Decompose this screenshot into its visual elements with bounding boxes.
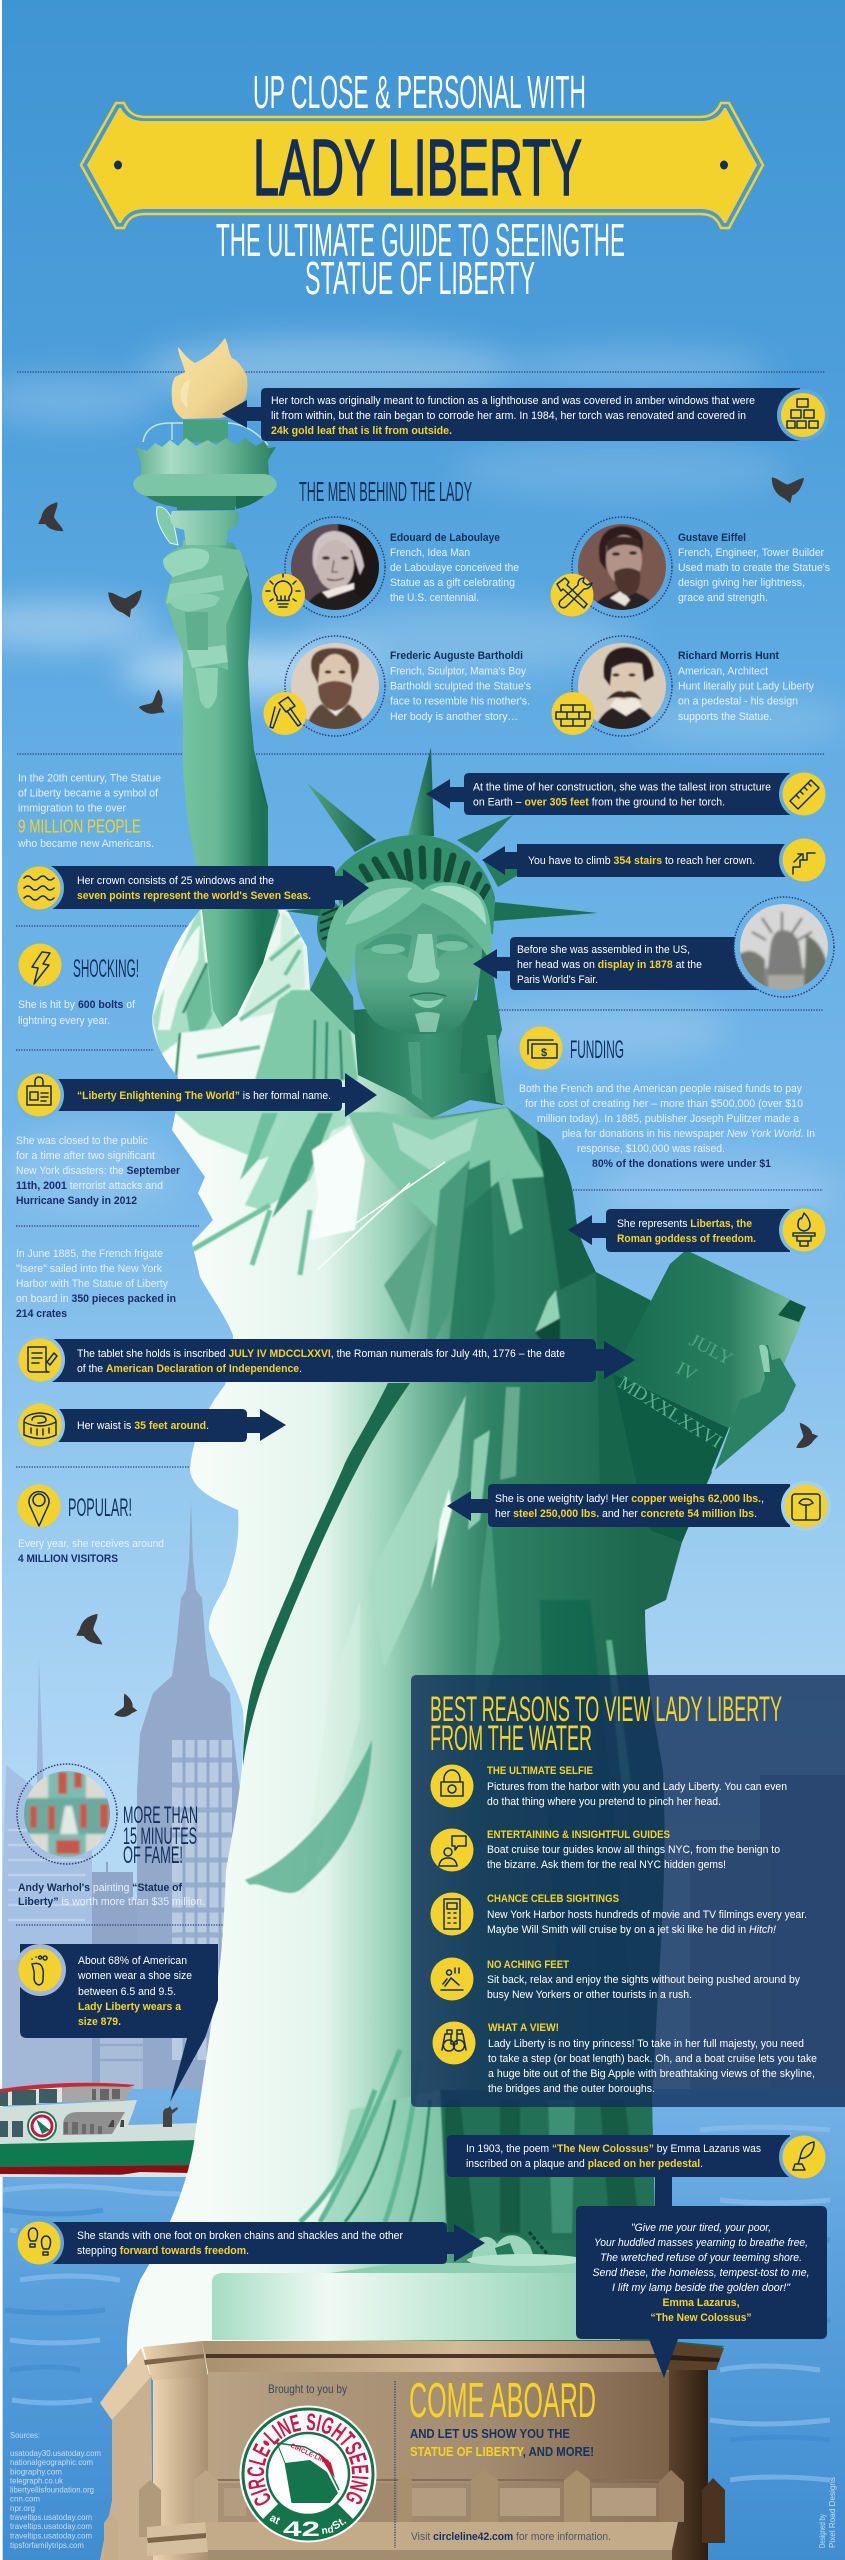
foot and chains bbox=[330, 2232, 600, 2273]
text: immigration: In the 20th century, The Statue bbox=[18, 772, 161, 784]
callout: shoe size: Lady Liberty wears a bbox=[78, 2001, 182, 2013]
reason: no aching feet: busy New Yorkers or other tourists in a rush. bbox=[487, 1989, 692, 2001]
reason: entertaining guides: ENTERTAINING & INSIGHTFUL GUIDES bbox=[487, 1829, 670, 1841]
reason: entertaining guides: Boat cruise tour guides know all things NYC, from the benign to bbox=[487, 1844, 780, 1856]
callout: poem quote: The wretched refuse of your teeming shore. bbox=[600, 2252, 802, 2264]
Bartholdi text: French, Sculptor, Mama's Boy bbox=[390, 666, 526, 678]
shocking text bbox=[18, 999, 136, 1027]
text: shipped in crates: on board in 350 pieces packed in bbox=[16, 1293, 176, 1305]
icon: bricks bbox=[552, 692, 594, 735]
sources: tipsforfamilytrips.com bbox=[10, 2541, 84, 2550]
sources: nationalgeographic.com bbox=[10, 2458, 93, 2467]
heading: more than 15 minutes of fame: OF FAME! bbox=[123, 1842, 183, 1869]
clouds bbox=[0, 336, 845, 1226]
pedestal lower panels bbox=[104, 2470, 725, 2560]
text: shipped in crates: "Isere" sailed into the New York bbox=[16, 1263, 162, 1275]
reason: no aching feet bbox=[430, 1958, 800, 2001]
callout: 354 stairs bbox=[482, 835, 829, 885]
text: closed to the public bbox=[16, 1135, 181, 1207]
subtitle bbox=[216, 214, 625, 304]
long dark fold bbox=[243, 1383, 410, 1766]
torch text: 24k gold leaf that is lit from outside. bbox=[271, 425, 452, 437]
pedestal bbox=[100, 2340, 725, 2560]
Eiffel text: French, Engineer, Tower Builder bbox=[678, 547, 824, 559]
sponsor tagline bbox=[410, 2426, 594, 2459]
callout: the new colossus bbox=[447, 2132, 829, 2182]
panel: best reasons to view from the water bbox=[411, 1675, 845, 2107]
reason: what a view: a huge bite out of the Big Apple with breathtaking views of the skyline, bbox=[488, 2068, 815, 2080]
heading: more than 15 minutes of fame: MORE THAN bbox=[123, 1802, 198, 1829]
reason: the ultimate selfie: THE ULTIMATE SELFIE bbox=[487, 1765, 593, 1777]
reason: the ultimate selfie: do that thing where you pretend to pinch her head. bbox=[487, 1796, 721, 1808]
robe folds bbox=[152, 905, 660, 2240]
text: SHOCKING! bbox=[73, 955, 139, 983]
sponsor tagline: AND LET US SHOW YOU THE bbox=[410, 2426, 570, 2441]
panel: Gustave Eiffel bbox=[550, 517, 830, 617]
Hunt text: Richard Morris Hunt bbox=[678, 650, 779, 662]
designer credit: Pixel Road Designs bbox=[828, 2477, 837, 2548]
harbor water bbox=[3, 2089, 845, 2560]
callout: weight bbox=[447, 1481, 831, 1531]
text: closed to the public: for a time after two significant bbox=[16, 1150, 155, 1162]
ship: CIRCLE·LINE bbox=[289, 2442, 330, 2466]
sources: usatoday30.usatoday.com bbox=[10, 2449, 101, 2458]
Warhol text: Liberty” is worth more than $35 million. bbox=[18, 1896, 205, 1908]
sources: libertyellisfoundation.org bbox=[10, 2486, 94, 2494]
callout: poem quote: "Give me your tired, your poor, bbox=[631, 2222, 771, 2234]
reason: no aching feet: NO ACHING FEET bbox=[487, 1959, 569, 1971]
Eiffel text: Used math to create the Statue's bbox=[678, 562, 830, 574]
reason: chance celeb sightings bbox=[430, 1892, 807, 1936]
funding text: response, $100,000 was raised. bbox=[577, 1143, 725, 1155]
shocking text: She is hit by 600 bolts of bbox=[18, 999, 136, 1011]
callout: formal name bbox=[14, 1070, 377, 1120]
icon: light bulb bbox=[262, 574, 305, 616]
Laboulaye text: Statue as a gift celebrating bbox=[390, 577, 515, 589]
icon: tape measure bbox=[18, 1404, 62, 1446]
callout: the new colossus: In 1903, the poem “The New Colossus” by Emma Lazarus was bbox=[466, 2143, 761, 2155]
Laboulaye text: French, Idea Man bbox=[390, 547, 470, 559]
heading: best reasons: FROM THE WATER bbox=[430, 1719, 592, 1758]
funding text: Both the French and the American people raised funds to pay bbox=[519, 1083, 802, 1095]
torch text: Her torch was originally meant to function as a lighthouse and was covered in amber windows that were bbox=[271, 395, 755, 407]
Bartholdi text bbox=[390, 650, 531, 723]
lower curtains bbox=[440, 2090, 660, 2240]
callout: waist bbox=[15, 1400, 286, 1450]
torch hand bbox=[157, 507, 248, 708]
crown dome bbox=[333, 835, 495, 935]
Eiffel text bbox=[678, 532, 830, 604]
panel: Richard Morris Hunt bbox=[552, 636, 814, 736]
sources bbox=[10, 2431, 101, 2550]
torch text: lit from within, but the rain began to corrode her arm. In 1984, her torch was renovated and covered in bbox=[271, 410, 746, 422]
Hunt text: supports the Statue. bbox=[678, 711, 772, 723]
flame bbox=[172, 338, 247, 419]
raised arm bbox=[183, 540, 278, 1027]
panel: Frederic Auguste Bartholdi bbox=[264, 636, 531, 736]
icon: map pin bbox=[18, 1484, 60, 1528]
callout: display in 1878: Before she was assembled in the US, bbox=[517, 944, 690, 956]
tablet hand bbox=[715, 1345, 796, 1470]
face bbox=[355, 902, 482, 1034]
reason: what a view: the bridges and the outer boroughs. bbox=[488, 2083, 655, 2095]
lower sleeve bbox=[172, 1110, 350, 1160]
icon: hammer and chisel bbox=[264, 692, 306, 735]
divider lines bbox=[16, 372, 825, 1925]
heading: more than 15 minutes of fame bbox=[123, 1802, 198, 1869]
torch bbox=[133, 420, 277, 545]
sources: biography.com bbox=[10, 2468, 62, 2476]
callout: poem quote: “The New Colossus” bbox=[650, 2312, 752, 2324]
sources: cnn.com bbox=[10, 2494, 40, 2504]
panel: shocking bbox=[18, 944, 139, 1027]
Hunt text: Hunt literally put Lady Liberty bbox=[678, 680, 814, 692]
icon: stairs bbox=[782, 838, 826, 882]
reason: entertaining guides bbox=[430, 1828, 780, 1872]
callout: tablet inscription: of the American Declaration of Independence. bbox=[77, 1363, 302, 1375]
city skyline bbox=[2, 1500, 845, 2089]
neck bbox=[353, 1000, 503, 1118]
icon: quill and ink bbox=[782, 2136, 826, 2178]
funding text: plea for donations in his newspaper New York World. In bbox=[562, 1128, 815, 1140]
icon: money: $ bbox=[541, 1047, 547, 1059]
visit link: Visit circleline42.com for more information. bbox=[411, 2531, 611, 2543]
Bartholdi text: face to resemble his mother's. bbox=[390, 696, 530, 708]
callout: tablet inscription bbox=[15, 1335, 635, 1385]
callout: shoe size: size 879. bbox=[78, 2016, 121, 2028]
subtitle: STATUE OF LIBERTY bbox=[305, 252, 535, 304]
painting: Warhol Statue of Liberty bbox=[17, 1764, 117, 1864]
portrait: Laboulaye bbox=[285, 517, 388, 617]
sponsor block bbox=[240, 2374, 611, 2548]
text: closed to the public: Hurricane Sandy in 2012 bbox=[16, 1195, 137, 1207]
Eiffel text: grace and strength. bbox=[678, 592, 768, 604]
callout: shoe size: women wear a shoe size bbox=[77, 1970, 192, 1982]
come aboard: COME ABOARD bbox=[409, 2374, 596, 2428]
reason: no aching feet: Sit back, relax and enjoy the sights without being pushed around by bbox=[487, 1974, 800, 1986]
logo bottom text: at bbox=[268, 2512, 282, 2527]
callout: poem quote: Your huddled masses yearning to breathe free, bbox=[594, 2237, 808, 2249]
title banner: LADY LIBERTY bbox=[253, 123, 582, 212]
icon: flame on torch bbox=[782, 1208, 826, 1252]
panel: funding bbox=[519, 1026, 815, 1170]
shocking text: lightning every year. bbox=[18, 1015, 110, 1027]
callout: tablet inscription: The tablet she holds is inscribed JULY IV MDCCLXXVI, the Roman numerals for July 4th, 1776 – the date bbox=[77, 1348, 565, 1360]
reason: entertaining guides: the bizarre. Ask them for the real NYC hidden gems! bbox=[487, 1859, 726, 1871]
sponsor tagline: STATUE OF LIBERTY, AND MORE! bbox=[410, 2444, 594, 2459]
callout: tallest iron structure: on Earth – over 305 feet from the ground to her torch. bbox=[473, 796, 725, 808]
portrait: Hunt bbox=[572, 636, 672, 736]
reason: chance celeb sightings: CHANCE CELEB SIGHTINGS bbox=[487, 1893, 619, 1905]
sleeve shading bbox=[152, 905, 222, 1055]
funding text: million today). In 1885, publisher Joseph Pulitzer made a bbox=[537, 1113, 800, 1125]
text: closed to the public: She was closed to the public bbox=[16, 1135, 148, 1147]
panel: funding: FUNDING bbox=[570, 1036, 624, 1064]
tablet: JULY bbox=[686, 1330, 736, 1370]
callout: broken chains: stepping forward towards freedom. bbox=[77, 2245, 249, 2257]
text: closed to the public: 11th, 2001 terrorist attacks and bbox=[16, 1180, 163, 1192]
funding text: 80% of the donations were under $1 bbox=[592, 1158, 771, 1170]
callout: tallest iron structure bbox=[426, 769, 829, 819]
callout: shoe size: between 6.5 and 9.5. bbox=[78, 1986, 176, 1998]
callout: weight: her steel 250,000 lbs. and her concrete 54 million lbs. bbox=[495, 1508, 757, 1520]
crown spikes bbox=[285, 747, 598, 921]
icon: foot bbox=[18, 1948, 62, 1992]
sources: npr.org bbox=[10, 2504, 35, 2513]
funding text bbox=[519, 1083, 815, 1170]
text: closed to the public: New York disasters: the September bbox=[16, 1165, 181, 1177]
icon: scroll bbox=[18, 1338, 62, 1382]
callout: seven seas: seven points represent the world's Seven Seas. bbox=[77, 890, 311, 902]
callout: weight: She is one weighty lady! Her copper weighs 62,000 lbs., bbox=[495, 1493, 764, 1505]
callout: display in 1878: her head was on display in 1878 at the bbox=[517, 959, 702, 971]
Eiffel text: Gustave Eiffel bbox=[678, 532, 746, 544]
heading: best reasons bbox=[430, 1690, 782, 1758]
reason: chance celeb sightings: Maybe Will Smith will cruise by on a jet ski like he did in Hitch! bbox=[487, 1924, 776, 1936]
ferry bbox=[0, 2083, 203, 2177]
title banner bbox=[81, 103, 763, 228]
Laboulaye text bbox=[390, 532, 519, 604]
popular text bbox=[18, 1538, 164, 1565]
icon: ruler bbox=[782, 772, 826, 816]
Warhol text: Andy Warhol's painting “Statue of bbox=[18, 1882, 182, 1894]
Hunt text bbox=[678, 650, 814, 723]
photo: statue head at Paris World's Fair bbox=[738, 902, 830, 996]
tablet: IV bbox=[673, 1358, 700, 1386]
callout: torch bbox=[222, 388, 829, 441]
callout: poem quote: I lift my lamp beside the golden door!" bbox=[612, 2282, 791, 2294]
logo bottom text: nd bbox=[321, 2524, 335, 2537]
text: immigration: 9 MILLION PEOPLE bbox=[18, 816, 141, 836]
heading: more than 15 minutes of fame: 15 MINUTES bbox=[123, 1823, 197, 1850]
flame highlight bbox=[180, 380, 190, 408]
icon: waves bbox=[18, 866, 60, 910]
logo bottom text: 42 bbox=[283, 2518, 320, 2541]
reason: what a view: to take a step (or boat length) back. Oh, and a boat cruise lets you take bbox=[488, 2053, 817, 2065]
text: THE MEN BEHIND THE LADY bbox=[299, 476, 472, 507]
logo: Circle Line Sightseeing: CIRCLE•LINE SIGHTSEEING bbox=[247, 2413, 369, 2506]
Laboulaye text: de Laboulaye conceived the bbox=[390, 562, 519, 574]
tablet: MDXXLXXVI bbox=[614, 1372, 726, 1453]
callout: shoe size bbox=[14, 1944, 218, 2102]
robe body and sleeve bbox=[127, 910, 712, 2375]
Laboulaye text: Edouard de Laboulaye bbox=[390, 532, 500, 544]
popular text: Every year, she receives around bbox=[18, 1538, 164, 1550]
panel: Edouard de Laboulaye bbox=[262, 517, 519, 617]
Hunt text: American, Architect bbox=[678, 666, 768, 678]
callout: poem quote bbox=[576, 2177, 827, 2378]
icon: id badge bbox=[18, 1074, 60, 1116]
callout: tallest iron structure: At the time of her construction, she was the tallest iron structure bbox=[473, 782, 771, 794]
callout: Libertas: She represents Libertas, the bbox=[617, 1218, 752, 1230]
panel: popular bbox=[18, 1484, 164, 1565]
text: immigration: of Liberty became a symbol of bbox=[18, 788, 159, 800]
brought to you by: Brought to you by bbox=[268, 2382, 347, 2396]
tablet thumb bbox=[759, 1345, 770, 1372]
Bartholdi text: Her body is another story… bbox=[390, 711, 518, 723]
text: immigration: immigration to the over bbox=[18, 802, 126, 814]
icon: money bbox=[520, 1026, 562, 1070]
text: shipped in crates: Harbor with The Statue of Liberty bbox=[16, 1278, 168, 1290]
popular text: 4 MILLION VISITORS bbox=[18, 1553, 118, 1565]
portrait: Bartholdi bbox=[285, 636, 385, 736]
funding text: for the cost of creating her – more than $500,000 (over $10 bbox=[525, 1098, 803, 1110]
portrait: Eiffel bbox=[572, 517, 672, 617]
text: shipped in crates: 214 crates bbox=[16, 1308, 67, 1320]
reason: the ultimate selfie bbox=[430, 1764, 787, 1808]
side hair bbox=[310, 955, 355, 1035]
head back hair bbox=[317, 902, 345, 954]
reason: chance celeb sightings: New York Harbor hosts hundreds of movie and TV filmings every year. bbox=[487, 1909, 807, 1921]
callout: Libertas bbox=[568, 1205, 829, 1255]
callout: 354 stairs: You have to climb 354 stairs to reach her crown. bbox=[528, 855, 755, 867]
callout: the new colossus: inscribed on a plaque and placed on her pedestal. bbox=[466, 2158, 703, 2170]
text: shipped in crates bbox=[16, 1248, 176, 1320]
callout: seven seas bbox=[14, 863, 369, 913]
statue of liberty bbox=[127, 338, 806, 2375]
facial features bbox=[362, 934, 474, 1032]
callout: Libertas: Roman goddess of freedom. bbox=[617, 1233, 756, 1245]
tablet arm bbox=[596, 1272, 680, 1500]
callout: display in 1878: Paris World's Fair. bbox=[517, 974, 598, 986]
callout: formal name: “Liberty Enlightening The World” is her formal name. bbox=[77, 1090, 331, 1102]
callout: broken chains: She stands with one foot on broken chains and shackles and the other bbox=[77, 2230, 403, 2242]
icon: wrench and hammer bbox=[550, 574, 594, 616]
callout: broken chains bbox=[14, 2218, 485, 2268]
sources: traveltips.usatoday.com bbox=[10, 2522, 92, 2531]
reason: the ultimate selfie: Pictures from the harbor with you and Lady Liberty. You can even bbox=[487, 1781, 787, 1793]
reason: what a view: Lady Liberty is no tiny princess! To take in her full majesty, you need bbox=[488, 2038, 804, 2050]
Bartholdi text: Bartholdi sculpted the Statue's bbox=[390, 680, 531, 692]
birds bbox=[35, 475, 820, 1724]
icon: lightning bolt bbox=[18, 944, 62, 986]
white crease lines bbox=[317, 1162, 445, 1270]
tablet bbox=[613, 1250, 806, 1542]
Laboulaye text: the U.S. centennial. bbox=[390, 592, 479, 604]
sources: traveltips.usatoday.com bbox=[10, 2513, 92, 2522]
icon: footprints bbox=[18, 2222, 60, 2264]
icon: scale bbox=[784, 1484, 828, 1528]
text: immigration: who became new Americans. bbox=[17, 838, 154, 850]
logo bottom text bbox=[268, 2512, 349, 2541]
icon: gold bars bbox=[781, 393, 825, 437]
callout: shoe size: About 68% of American bbox=[78, 1955, 187, 1967]
designer credit: Designed by bbox=[818, 2514, 827, 2548]
sources: telegraph.co.uk bbox=[10, 2476, 64, 2486]
plinth bbox=[212, 2273, 620, 2340]
callout: waist: Her waist is 35 feet around. bbox=[77, 1420, 209, 1432]
Warhol text bbox=[18, 1882, 205, 1908]
heading: popular: POPULAR! bbox=[68, 1494, 132, 1522]
sources: Sources: bbox=[10, 2431, 40, 2440]
text: shipped in crates: In June 1885, the French frigate bbox=[16, 1248, 163, 1260]
dotted separator bbox=[394, 2381, 396, 2548]
torch text bbox=[271, 395, 755, 437]
hair band bbox=[326, 879, 492, 985]
designer credit bbox=[818, 2477, 837, 2548]
callout: poem quote: Emma Lazarus, bbox=[662, 2297, 740, 2309]
Eiffel text: design giving her lightness, bbox=[678, 577, 805, 589]
title block bbox=[81, 66, 763, 304]
logo bottom text: St. bbox=[330, 2515, 349, 2533]
reason: what a view: WHAT A VIEW! bbox=[488, 2022, 559, 2034]
callout: display in 1878 bbox=[473, 897, 834, 997]
text: immigration bbox=[17, 772, 161, 850]
sources: traveltips.usatoday.com bbox=[10, 2532, 92, 2540]
callout: seven seas: Her crown consists of 25 windows and the bbox=[77, 875, 274, 887]
reason: what a view bbox=[432, 2022, 817, 2095]
Hunt text: on a pedestal - his design bbox=[678, 696, 798, 708]
callout: poem quote: Send these, the homeless, tempest-tost to me, bbox=[592, 2267, 810, 2279]
Bartholdi text: Frederic Auguste Bartholdi bbox=[390, 650, 523, 662]
panel: Warhol bbox=[17, 1764, 205, 1908]
